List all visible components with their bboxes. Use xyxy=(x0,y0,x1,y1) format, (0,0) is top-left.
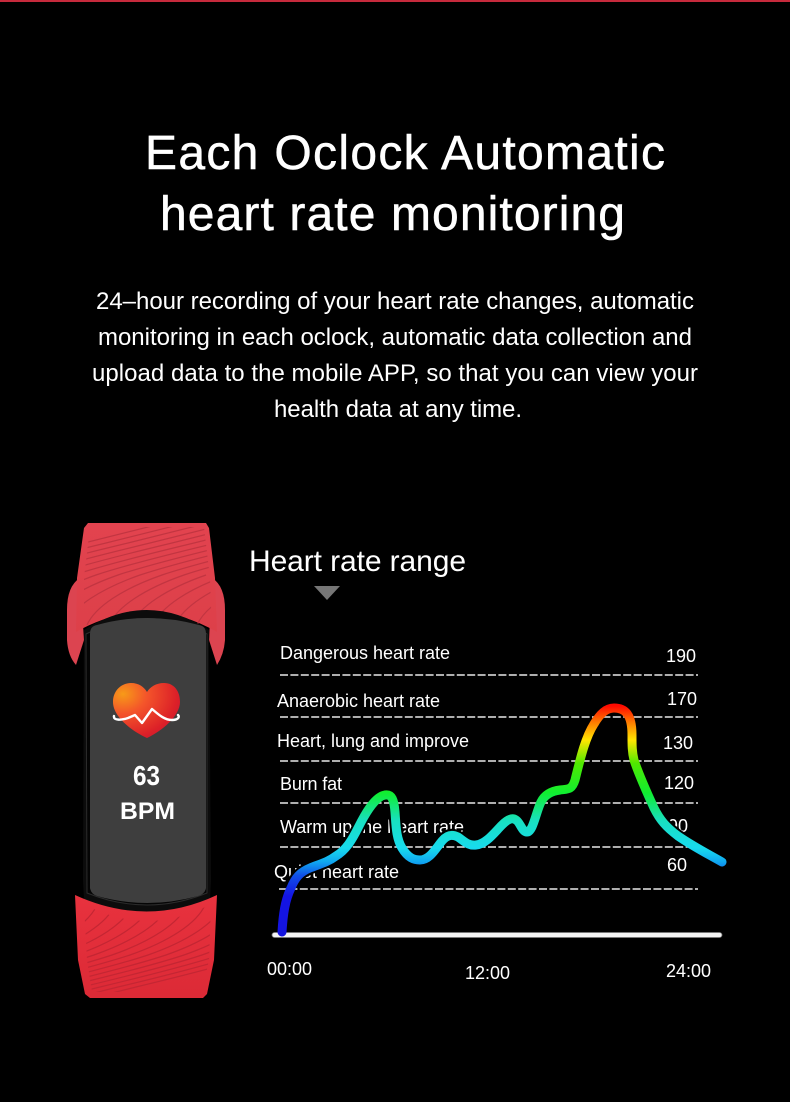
zone labels: Quiet heart rate xyxy=(274,862,399,882)
zone labels: Anaerobic heart rate xyxy=(277,691,440,711)
zone values: 120 xyxy=(664,773,694,793)
fitness band xyxy=(67,523,225,998)
title: Each Oclock Automatic xyxy=(145,127,665,180)
zone values: 90 xyxy=(668,816,688,836)
heart rate value: 63 xyxy=(133,760,160,791)
heart icon xyxy=(113,683,180,738)
zone values: 170 xyxy=(667,689,697,709)
description paragraph: health data at any time. xyxy=(274,396,522,423)
heart rate range heading: Heart rate range xyxy=(249,545,466,578)
zone values: 130 xyxy=(663,733,693,753)
description paragraph: 24–hour recording of your heart rate changes, automatic xyxy=(96,288,694,315)
description paragraph: upload data to the mobile APP, so that you can view your xyxy=(92,360,698,387)
zone labels: Burn fat xyxy=(280,774,342,794)
dashed grid lines xyxy=(279,675,698,889)
description paragraph: monitoring in each oclock, automatic data collection and xyxy=(98,324,692,351)
downward triangle xyxy=(314,586,340,600)
curve halo xyxy=(282,708,722,932)
time labels: 24:00 xyxy=(666,961,711,981)
time labels: 00:00 xyxy=(267,959,312,979)
heart rate chart xyxy=(267,643,722,983)
screen xyxy=(90,618,206,903)
zone values: 190 xyxy=(666,646,696,666)
bottom strap xyxy=(75,895,217,998)
zone labels: Dangerous heart rate xyxy=(280,643,450,663)
zone values: 60 xyxy=(667,855,687,875)
bezel xyxy=(83,610,211,912)
zone labels: Warm up the heart rate xyxy=(280,817,464,837)
description paragraph xyxy=(92,288,698,423)
zone labels xyxy=(274,643,469,882)
zone values xyxy=(663,646,697,875)
zone labels: Heart, lung and improve xyxy=(277,731,469,751)
time labels: 12:00 xyxy=(465,963,510,983)
heart rate curve xyxy=(282,708,722,932)
BPM label: BPM xyxy=(120,798,175,825)
title xyxy=(145,127,665,241)
top red bar xyxy=(0,0,790,2)
side lugs xyxy=(67,578,225,665)
title: heart rate monitoring xyxy=(160,188,625,241)
x axis xyxy=(272,932,722,938)
top strap xyxy=(76,523,216,628)
time labels xyxy=(267,959,711,983)
